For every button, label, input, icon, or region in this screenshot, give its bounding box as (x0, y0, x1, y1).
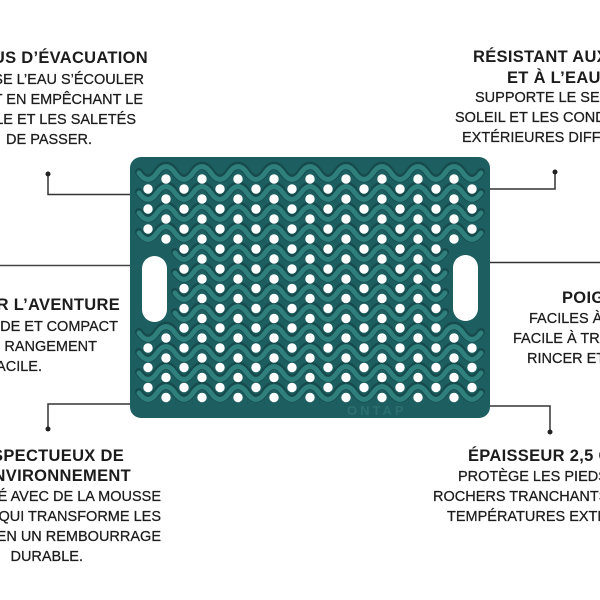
text block: eco friendly (0, 447, 161, 565)
text block: adventure: RANGEMENT (4, 339, 97, 355)
text block: handles (513, 288, 600, 367)
product: green perforated mat (130, 157, 490, 418)
text block: UV and salt resistant (455, 47, 600, 146)
text block: drainage holes: DE PASSER. (6, 132, 92, 148)
right handle (453, 255, 478, 321)
connector: middle left (0, 264, 131, 266)
text block: eco friendly: QUI TRANSFORME LES (0, 509, 161, 525)
text block: adventure (0, 296, 120, 375)
mat body (130, 157, 490, 418)
drainage holes (148, 179, 478, 398)
text block: drainage holes (0, 48, 148, 148)
text block: eco friendly: DURABLE. (10, 549, 83, 565)
wave ridge shadows (139, 166, 481, 398)
text block: thickness (433, 446, 600, 525)
connector: top left (46, 172, 131, 194)
connector: top right (489, 170, 558, 189)
left handle (142, 256, 167, 322)
connector: bottom right (489, 406, 552, 434)
wave ridges (139, 166, 481, 400)
connector: middle right (489, 262, 600, 264)
embossed logo: ONTAP (347, 403, 407, 418)
connector: bottom left (46, 404, 131, 432)
